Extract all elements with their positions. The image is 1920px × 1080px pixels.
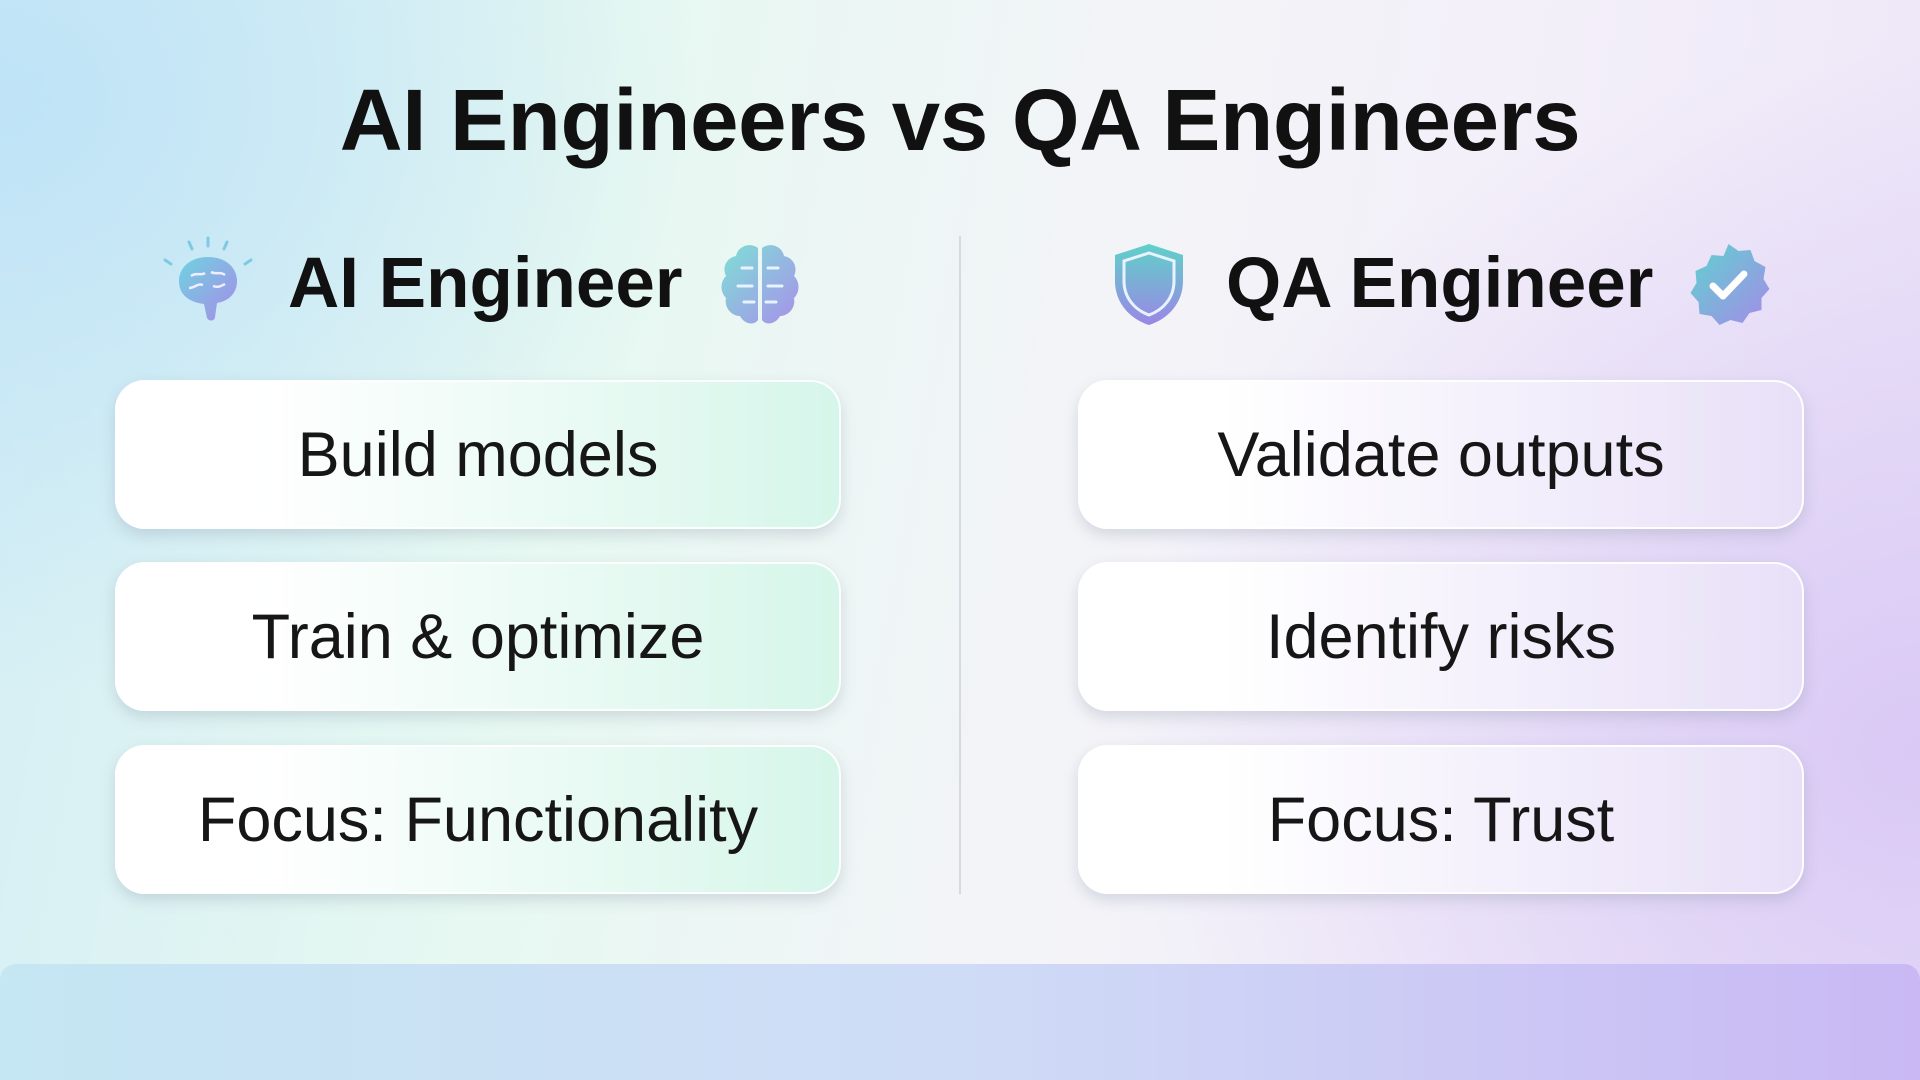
card: Build models — [115, 380, 841, 529]
card: Identify risks: Identify risks — [1266, 602, 1616, 672]
icon: brain right — [722, 245, 798, 324]
card: Validate outputs: Validate outputs — [1217, 420, 1665, 490]
card: Train & optimize: Train & optimize — [252, 602, 704, 672]
icon: check badge — [1690, 244, 1770, 325]
title: AI Engineers vs QA Engineers — [340, 72, 1580, 169]
card: Build models: Build models — [298, 420, 658, 490]
card: Focus: Trust — [1078, 745, 1804, 894]
icon: brain left — [164, 236, 252, 320]
heading: QA Engineer: QA Engineer — [1226, 244, 1653, 323]
card: Train & optimize — [115, 562, 841, 711]
icon: shield — [1115, 244, 1183, 325]
card: Validate outputs — [1078, 380, 1804, 529]
card: Focus: Functionality: Focus: Functionality — [198, 784, 758, 854]
card: Focus: Trust: Focus: Trust — [1268, 784, 1614, 854]
divider — [959, 236, 961, 894]
card: Focus: Functionality — [115, 745, 841, 894]
heading: AI Engineer: AI Engineer — [288, 244, 683, 323]
bottom band — [0, 964, 1920, 1080]
card: Identify risks — [1078, 562, 1804, 711]
